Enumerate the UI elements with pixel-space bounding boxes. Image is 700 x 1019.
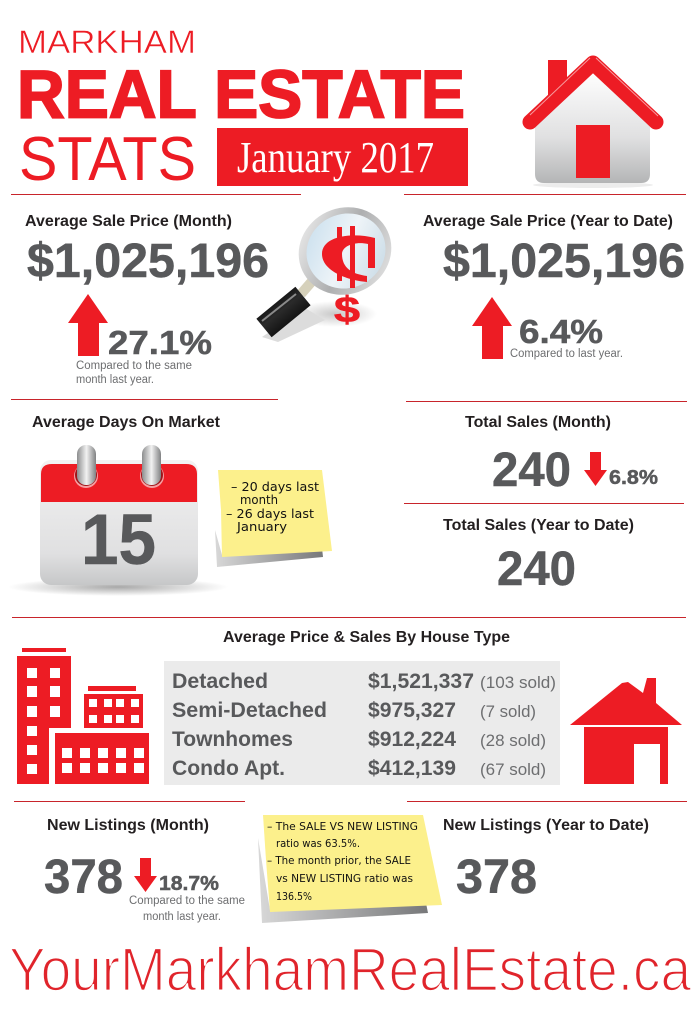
panel: house type table — [164, 661, 560, 785]
icon: down arrow — [584, 452, 607, 486]
heading: price by house type: Average Price & Sales By House Type — [223, 629, 510, 646]
heading: Average Days On Market — [32, 414, 221, 431]
icon: down arrow — [134, 858, 157, 892]
icon: apartment buildings — [17, 648, 149, 784]
change percent: 18.7% — [159, 873, 219, 895]
icon: up arrow — [472, 297, 512, 359]
icon: house with grey body and red roof — [530, 58, 658, 188]
row: detached: Detached — [172, 670, 268, 693]
panel: total sales month — [465, 414, 658, 497]
sticky note: sale vs new listing ratio: ratio was 63.5%. — [276, 837, 360, 850]
icon: calendar showing 15 — [8, 445, 228, 596]
heading: Total Sales (Month) — [465, 414, 611, 431]
row: townhomes — [172, 728, 546, 751]
title: MARKHAM — [18, 24, 196, 60]
heading: Total Sales (Year to Date) — [443, 517, 634, 534]
panel: new listings month — [44, 817, 245, 923]
panel: total sales year to date — [443, 517, 634, 596]
sales figure: 240 — [497, 543, 576, 596]
row: semi-detached: $975,327 — [368, 699, 456, 722]
comparison note: Compared to the same — [76, 360, 192, 372]
icon: red house — [570, 678, 682, 784]
date banner: January 2017 — [237, 133, 434, 182]
price: $1,025,196 — [443, 235, 685, 288]
icon: magnifying glass over dollar sign — [262, 192, 406, 342]
comparison note: Compared to the same — [129, 895, 245, 907]
sticky note: days comparison: – 26 days last — [226, 507, 314, 521]
sticky note: sale vs new listing ratio: – The month prior, the SALE — [267, 854, 411, 867]
sticky note: sale vs new listing ratio: 136.5% — [276, 890, 312, 903]
listings figure: 378 — [44, 851, 123, 904]
comparison note: Compared to last year. — [510, 348, 623, 360]
change percent: 27.1% — [108, 324, 212, 361]
icon: calendar showing 15: 15 — [81, 501, 156, 580]
heading: New Listings (Year to Date) — [443, 817, 649, 834]
sticky note: days comparison: January — [236, 520, 287, 534]
row: condo apartments: $412,139 — [368, 757, 456, 780]
icon: magnifying glass over dollar sign: $ — [334, 289, 360, 330]
row: detached: (103 sold) — [480, 673, 556, 692]
icon: up arrow — [68, 294, 108, 356]
panel: average sale price month — [25, 213, 269, 386]
row: condo apartments: Condo Apt. — [172, 757, 285, 780]
row: townhomes: (28 sold) — [480, 731, 546, 750]
sticky note: sale vs new listing ratio — [258, 815, 442, 923]
row: semi-detached — [172, 699, 536, 722]
title — [17, 24, 465, 194]
panel: new listings year to date — [443, 817, 649, 904]
sticky note: days comparison — [215, 470, 332, 567]
sticky note: sale vs new listing ratio: vs NEW LISTING ratio was — [276, 872, 413, 885]
sales figure: 240 — [492, 444, 571, 497]
heading: Average Sale Price (Month) — [25, 213, 232, 230]
sticky note: days comparison: month — [240, 493, 278, 507]
row: townhomes: Townhomes — [172, 728, 293, 751]
row: townhomes: $912,224 — [368, 728, 456, 751]
row: detached — [172, 670, 556, 693]
heading: New Listings (Month) — [47, 817, 209, 834]
panel: average sale price month: month last year. — [76, 374, 154, 386]
panel: average days on market — [8, 414, 332, 596]
change percent: 6.4% — [519, 313, 603, 350]
change percent: 6.8% — [609, 467, 658, 489]
row: semi-detached: (7 sold) — [480, 702, 536, 721]
title: STATS — [19, 125, 196, 194]
row: condo apartments — [172, 757, 546, 780]
heading: Average Sale Price (Year to Date) — [423, 213, 673, 230]
sticky note: sale vs new listing ratio: – The SALE VS NEW LISTING — [267, 820, 418, 833]
listings figure: 378 — [456, 851, 537, 904]
row: condo apartments: (67 sold) — [480, 760, 546, 779]
row: detached: $1,521,337 — [368, 670, 474, 693]
sticky note: days comparison: – 20 days last — [231, 480, 319, 494]
panel: new listings month: month last year. — [143, 911, 221, 923]
panel: average sale price year to date — [423, 213, 685, 360]
title: REAL ESTATE — [17, 56, 465, 132]
price: $1,025,196 — [27, 235, 269, 288]
row: semi-detached: Semi-Detached — [172, 699, 327, 722]
